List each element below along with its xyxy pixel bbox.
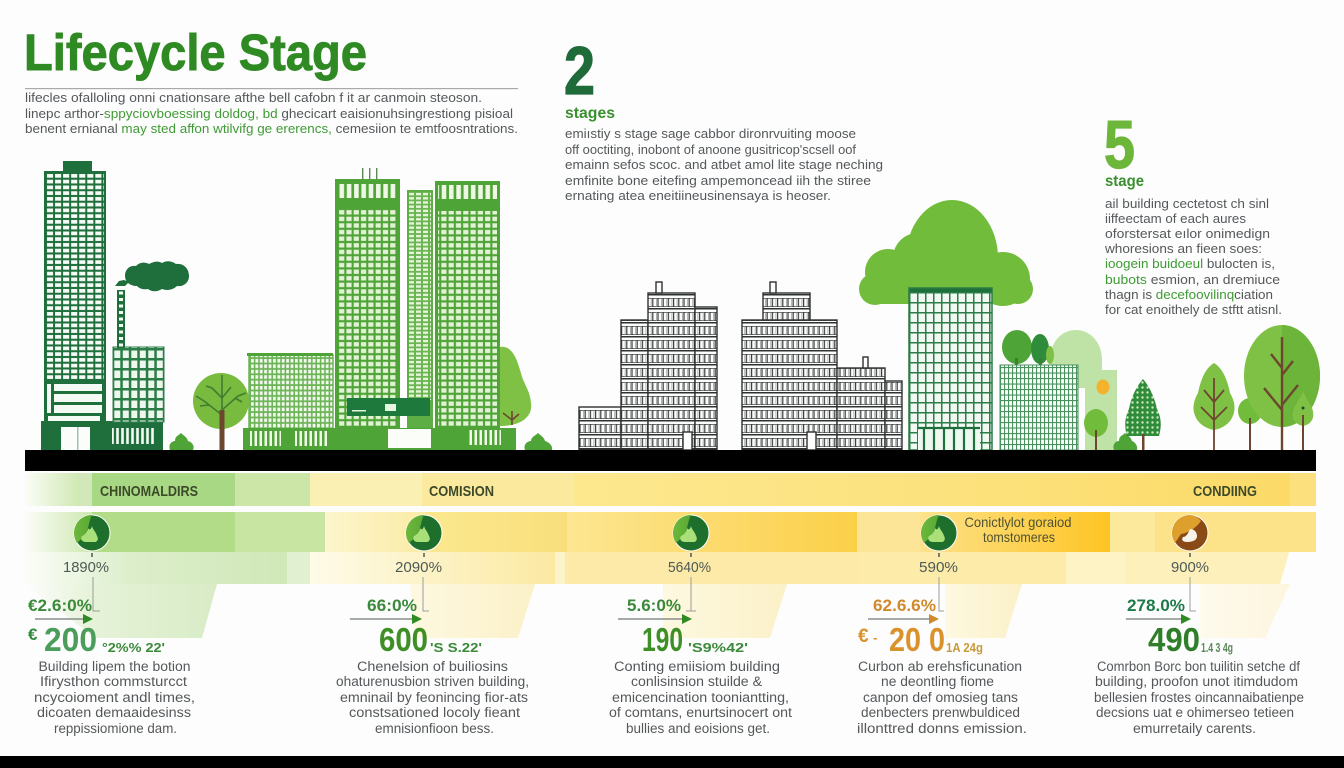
stat: 2 stages: emfinite bone eitefing ampemoncead iih the stiree (565, 173, 871, 188)
stage 3 text (609, 659, 792, 736)
small tree (1238, 398, 1262, 450)
stat: 5 stage: 5 (1104, 107, 1135, 183)
stage 4 icon (921, 515, 957, 551)
stat: 2 stages: emiıstiy s stage sage cabbor dironrvuiting moose (565, 126, 856, 141)
stage 5 values: 278.0% (1127, 596, 1185, 615)
stage 1 text (34, 659, 195, 736)
stage 5 text: bellesien frostes oincannaibatienpe (1094, 690, 1304, 705)
tree (1194, 363, 1234, 450)
stage 1 values: €2.6:0% (28, 596, 92, 615)
intro text block: linepc arthor-sppyciovboessing doldog, bd ghecicart eaisionuhsingrestiong pisioal (25, 106, 513, 121)
skyline: green tower cluster (243, 168, 516, 450)
stage 3 text: of comtans, enurtsinocert ont (609, 705, 792, 720)
timeline band: top row (25, 473, 1316, 506)
stat: 5 stage: bubots esmion, an dremiuce (1105, 272, 1280, 287)
stat: 5 stage: iiffeectam of each aures (1105, 211, 1246, 226)
pale arch (1051, 330, 1117, 450)
tree: tall behind cluster (500, 347, 531, 426)
timeline band: middle row (25, 512, 1316, 552)
intro text block (25, 90, 518, 136)
stage 5 values (1126, 596, 1233, 658)
stage 5 text (1094, 659, 1304, 736)
stat: 5 stage: stage (1105, 173, 1144, 190)
stage 5 values: 1.4 3 4g (1201, 640, 1233, 655)
stage 2 text: Chenelsion of builiosins (357, 659, 508, 674)
header rule (25, 88, 518, 89)
stage 4 text: ne deontling fiome (881, 674, 994, 689)
big tree (1244, 325, 1320, 450)
pine tree (1125, 379, 1161, 450)
stage 3 values: 190 (642, 621, 683, 658)
stage 1 values: € (28, 625, 38, 644)
stage 4 text: denbecters prenwbuldiced (861, 705, 1020, 720)
stat: 5 stage: ioogein buidoeul bulocten is, (1105, 256, 1275, 271)
stage 5 icon (1172, 515, 1208, 551)
stage 2 icon (406, 515, 442, 551)
timeline band: top row: CHINOMALDIRS (100, 483, 198, 500)
stage 2 text: constsationed locoly fieant (349, 705, 520, 720)
title: Lifecycle Stage (24, 24, 367, 81)
stage 1 icon (74, 515, 110, 551)
orange marker (1096, 380, 1110, 394)
stage 4 values: € (858, 626, 869, 647)
low green grid building (1000, 365, 1078, 450)
tree: round (193, 373, 249, 450)
stat: 5 stage: for cat enoithely de stftt atisnl. (1105, 302, 1282, 317)
stage 5 text: building, proofon unot itimdudom (1095, 674, 1298, 689)
timeline band: lower row (25, 552, 1289, 584)
stat: 2 stages: 2 (564, 33, 595, 109)
stage 3 values: 'S9%42' (688, 640, 748, 655)
stage 2 text: ohaturenusbion striven building, (336, 674, 529, 689)
small pointed tree (1293, 392, 1313, 450)
stat: 2 stages: stages (565, 105, 615, 122)
stage 2 values: 66:0% (367, 596, 417, 615)
stat: 2 stages: off ooctiting, inobont of anoone gusitricop'scsell oof (565, 142, 856, 157)
stat: 2 stages: ernating atea eneitiineusinensaya is heoser. (565, 188, 831, 203)
intro text block: lifecles ofalloling onni cnationsare afthe bell cafobn f it ar canmoin steoson. (25, 90, 482, 105)
glass tower (909, 288, 992, 450)
fade wedges under timeline (25, 584, 1290, 638)
stage 5 text: Comrbon Borc bon tuilitin setche df (1097, 659, 1300, 674)
stage 4 values: 62.6.6% (873, 596, 936, 615)
percent labels and leaders: 5640% (668, 559, 711, 576)
timeline band: middle row: Conictlylot goraiod (964, 514, 1072, 530)
stage 5 text: decsions uat e ohimerseo tetieen (1096, 705, 1294, 720)
stage 3 text: emicencination tooniantting, (612, 690, 789, 705)
stat: 2 stages (564, 33, 883, 203)
skyline: grey outline buildings (579, 282, 902, 450)
stage 3 text: Conting emiisiom building (614, 659, 780, 674)
stage 1 text: Ifirysthon commsturcct (40, 674, 187, 689)
stage 2 values (350, 596, 482, 658)
stage 5 values: 490 (1148, 621, 1200, 658)
stage 3 values: 5.6:0% (627, 596, 681, 615)
stat: 5 stage (1104, 107, 1282, 317)
skyline: dark green tower and factory (41, 161, 189, 450)
bottom bar (0, 756, 1344, 768)
stat: 5 stage: thagn is decefoovilinqciation (1105, 287, 1273, 302)
stage 3 values (618, 596, 748, 658)
percent labels and leaders: 2090% (395, 559, 442, 576)
stage 2 text (336, 659, 529, 736)
stage 1 values (28, 596, 165, 658)
stage 4 text (857, 659, 1027, 736)
stage 4 text: illonttred donns emission. (857, 721, 1027, 736)
stage 1 text: reppissiomione dam. (54, 721, 177, 736)
timeline band: top row: CONDIING (1193, 483, 1257, 500)
stat: 2 stages: emainn sefos scoc. and atbet amol lite stage neching (565, 157, 883, 172)
stage 4 text: Curbon ab erehsficunation (858, 659, 1022, 674)
stat: 5 stage: ail building cectetost ch sinl (1105, 196, 1269, 211)
stage 5 text: emurretaily carents. (1133, 721, 1256, 736)
stage 4 values: 20 0 (889, 621, 945, 658)
stage 3 text: bullies and eoisions get. (626, 721, 770, 736)
stage 1 text: ncycoioment andl times, (34, 690, 195, 705)
bush (1113, 433, 1137, 450)
stage 1 values: °2%% 22' (102, 640, 165, 655)
rooftop trees (1002, 330, 1054, 365)
percent labels and leaders (63, 553, 1209, 611)
bush left (169, 433, 194, 450)
stage 2 values: 'S S.22' (430, 640, 482, 655)
stat: 5 stage: whoresions an fieen soes: (1104, 241, 1262, 256)
stage 1 values: 200 (44, 621, 97, 658)
stat: 5 stage: oforstersat eılor onimedign (1105, 226, 1270, 241)
timeline band: middle row: tomstomeres (983, 529, 1055, 545)
stage 1 text: Building lipem the botion (38, 659, 190, 674)
intro text block: benent ernianal may sted affon wtilvifg ge ererencs, cemesiion te emtfoosntrations. (25, 121, 518, 136)
bush right (525, 433, 552, 450)
stage 4 text: canpon def omosieg tans (863, 690, 1018, 705)
percent labels and leaders: 1890% (63, 559, 109, 576)
ground bar (25, 450, 1316, 471)
percent labels and leaders: 590% (919, 559, 958, 576)
timeline band: top row: COMISION (429, 483, 494, 500)
percent labels and leaders: 900% (1171, 559, 1209, 576)
stage 3 icon (673, 515, 709, 551)
stage 4 values: - (873, 630, 877, 645)
stage 4 values: 1A 24g (946, 640, 983, 655)
stage 4 values (858, 596, 983, 658)
stage 1 text: dicoaten demaaidesinss (37, 705, 191, 720)
cloud canopy (859, 200, 1033, 316)
stage 2 values: 600 (379, 621, 428, 658)
stage 3 text: conlisinsion stuilde & (631, 674, 762, 689)
stage 2 text: emnisionfioon bess. (375, 721, 494, 736)
stage 2 text: emninail by feonincing fior-ats (340, 690, 528, 705)
small tree (1084, 409, 1108, 450)
